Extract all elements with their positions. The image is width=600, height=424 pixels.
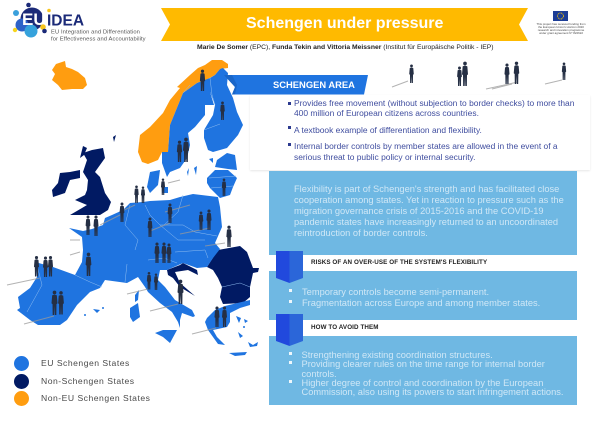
legend item: EU Schengen States: EU Schengen States	[41, 358, 130, 368]
text: flexibility paragraph: cooperation among states. Yet in reaction to pressure such as the	[294, 194, 564, 204]
bullets: risks: Fragmentation across Europe and among member states.	[302, 298, 540, 308]
bullets: how to avoid: Higher degree of control and coordination by the European	[302, 378, 543, 388]
logo: EU IDEA: EU	[22, 10, 46, 29]
Greece	[205, 300, 250, 345]
Corsica	[135, 290, 139, 302]
Crete	[229, 352, 247, 356]
panel: Schengen area	[250, 95, 590, 170]
Sweden	[162, 78, 214, 177]
bullets: Schengen area facts: Provides free movement (without subjection to border checks) to more than	[294, 98, 574, 108]
Norway	[138, 60, 228, 164]
United Kingdom	[70, 148, 111, 215]
bullets: risks: Temporary controls become semi-permanent.	[302, 287, 489, 297]
legend item: EU Schengen States	[14, 356, 130, 371]
Latvia and Lithuania	[207, 170, 237, 198]
bullets: Schengen area facts: Internal border controls by member states are allowed in the event of a	[294, 141, 558, 151]
Greek islands	[236, 316, 241, 323]
bullets: how to avoid: Providing clearer rules on the time range for internal border	[302, 359, 545, 369]
EU flag and funding note	[536, 11, 586, 35]
EU flag and funding note: research and innovation programme	[538, 28, 584, 32]
Sardinia	[130, 303, 140, 322]
bullets: how to avoid: Strengthening existing coordination structures.	[302, 350, 493, 360]
panel: how to avoid	[269, 336, 577, 405]
Ireland	[52, 170, 80, 197]
Denmark	[147, 170, 160, 193]
bullets: how to avoid	[289, 350, 563, 397]
title banner	[161, 8, 528, 41]
logo: EU IDEA: EU Integration and Differentiation	[51, 29, 140, 35]
Switzerland	[124, 250, 149, 264]
panel: flexibility	[269, 171, 577, 255]
bullets: how to avoid: controls.	[302, 369, 337, 379]
shadows of figures	[7, 80, 562, 334]
bullets: how to avoid: Commission, also using its powers to start infringement actions.	[302, 387, 563, 397]
logo: EU IDEA: for Effectiveness and Accountability	[51, 37, 146, 43]
heading: how to avoid: HOW TO AVOID THEM	[311, 324, 379, 331]
Romania and Bulgaria	[207, 246, 259, 304]
logo: EU IDEA	[12, 2, 146, 43]
text: flexibility paragraph: reintroduction of border controls.	[294, 228, 428, 238]
bullets: Schengen area facts: serious threat to public policy or internal security.	[294, 152, 475, 162]
Baltic islands	[194, 166, 197, 175]
mainland Europe	[17, 194, 222, 328]
bullets: risks	[289, 287, 540, 308]
icon: risks ribbon	[276, 251, 303, 283]
legend item: Non-Schengen States: Non-Schengen States	[41, 376, 135, 386]
EU Schengen states	[17, 68, 258, 356]
bullets: Schengen area facts	[288, 98, 574, 162]
EU flag and funding note: This project has received funding from	[536, 22, 586, 26]
Iceland	[52, 61, 87, 90]
Sicily	[155, 330, 177, 343]
people silhouettes	[34, 62, 566, 327]
bullets: Schengen area facts: A textbook example of differentiation and flexibility.	[294, 124, 482, 134]
text: flexibility paragraph: migration governance crisis of 2015-2016 and the COVID-19	[294, 206, 544, 216]
heading: Schengen area ribbon	[224, 75, 368, 94]
internal borders	[27, 78, 250, 312]
text: flexibility paragraph: pandemic states have increasingly returned to an uncoordinated	[294, 216, 558, 226]
Scottish isles	[113, 135, 116, 142]
Estonia	[215, 153, 237, 170]
heading: Schengen area ribbon: SCHENGEN AREA	[273, 79, 355, 90]
panel: risks	[269, 271, 577, 320]
legend item: Non-EU Schengen States	[14, 391, 150, 406]
text: flexibility paragraph: Flexibility is part of Schengen's strength and has facilitated close	[294, 184, 559, 194]
Non-Schengen states	[52, 135, 259, 304]
icon: how to avoid ribbon	[276, 314, 303, 346]
heading: risks: RISKS OF AN OVER-USE OF THE SYSTEM'S FLEXIBILITY	[311, 259, 487, 266]
Croatia	[167, 263, 198, 296]
bullets: Schengen area facts: 400 million of European citizens across countries.	[294, 108, 479, 118]
authors line: Marie De Somer (EPC), Funda Tekin and Vittoria Meissner (Institut für Europäische Politik - IEP)	[197, 44, 494, 51]
legend item: Non-EU Schengen States: Non-EU Schengen States	[41, 393, 150, 403]
EU flag and funding note: under grant agreement N° 822622	[539, 31, 583, 35]
EU flag and funding note: the European Union's Horizon 2020	[538, 25, 584, 29]
logo: EU IDEA: IDEA	[47, 12, 84, 30]
title: Schengen under pressure	[246, 15, 443, 32]
Finland	[204, 68, 243, 152]
legend item: Non-Schengen States	[14, 374, 135, 389]
text: flexibility paragraph	[294, 184, 564, 238]
legend	[14, 356, 150, 406]
Balearic islands	[93, 309, 100, 313]
